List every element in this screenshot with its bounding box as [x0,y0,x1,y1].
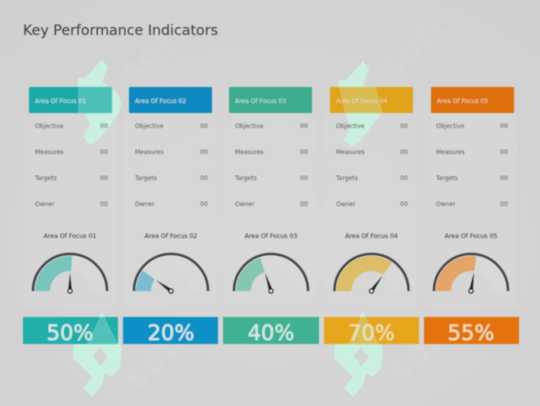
metric rows 05: Objective [436,123,465,130]
watermark: faint wordmarks: soft [371,5,457,89]
metric rows 03: Objective [235,123,264,130]
metric rows 01: 00 [100,175,108,182]
metric rows 03: Owner [235,201,255,208]
header 04 [330,87,413,113]
gauge 04 [334,254,408,293]
metric rows 02: Objective [135,123,164,130]
watermark overlay on coloured bars [78,87,383,344]
metric rows 02: 00 [200,175,208,182]
metric rows 01 [34,123,108,208]
metric rows 04: Targets [335,175,358,182]
metric rows 03: Targets [234,175,257,182]
metric rows 05: 00 [500,201,508,208]
metric rows 03: 00 [300,149,308,156]
metric rows 05: 00 [500,149,508,156]
metric rows 05: Targets [435,175,458,182]
metric rows 03: Measures [235,149,264,156]
metric rows 04: 00 [400,123,408,130]
gauge name 03: Area Of Focus 03 [245,233,297,240]
metric rows 05: Measures [436,149,465,156]
watermark: faint wordmarks: soft [111,9,197,93]
metric rows 05: 00 [500,175,508,182]
value bar 03 [223,317,319,345]
header 02: Area Of Focus 02 [135,98,186,105]
header 03 [229,87,312,113]
gauge name 01: Area Of Focus 01 [44,233,96,240]
value bar 03: 40% [248,321,294,345]
metric rows 01: 00 [100,149,108,156]
gauge 05 [434,254,508,293]
metric rows 03: 00 [300,201,308,208]
watermark: faint wordmarks: soft [114,315,200,399]
header 01 [29,87,112,113]
panel: area of focus 04 [324,87,419,345]
watermark logos [73,59,383,397]
metric rows 04: 00 [400,149,408,156]
metric rows 02: 00 [200,123,208,130]
metric rows 02: Measures [135,149,164,156]
metric rows 04 [335,123,408,208]
value bar 02 [123,317,218,345]
metric rows 03 [234,123,308,208]
metric rows 02 [134,123,208,208]
panel: area of focus 03 [223,87,319,345]
panel backgrounds [24,113,517,308]
value bar 01 [23,317,118,345]
metric rows 01: 00 [100,201,108,208]
metric rows 01: Objective [35,123,64,130]
gauge 02 [134,254,208,293]
metric rows 02: 00 [200,149,208,156]
metric rows 04: Objective [336,123,365,130]
title: Key Performance Indicators [23,23,218,39]
value bar 05 [424,317,519,345]
metric rows 05: Owner [436,201,456,208]
metric rows 04: Owner [336,201,356,208]
header 03: Area Of Focus 03 [235,98,286,105]
metric rows 04: 00 [400,201,408,208]
metric rows 02: 00 [200,201,208,208]
metric rows 04: Measures [336,149,365,156]
metric rows 01: Owner [35,201,55,208]
metric rows 01: Targets [34,175,57,182]
metric rows 01: Measures [35,149,64,156]
metric rows 05: 00 [500,123,508,130]
value bar 01: 50% [47,321,93,345]
panel: area of focus 05 [424,87,519,345]
value bar 04 [324,317,419,345]
header 05 [431,87,514,113]
gauge name 05: Area Of Focus 05 [445,233,497,240]
metric rows 04: 00 [400,175,408,182]
metric rows 03: 00 [300,123,308,130]
gauge name 04: Area Of Focus 04 [345,233,398,240]
panel: area of focus 01 [23,87,118,345]
watermark: faint wordmarks [111,5,465,399]
metric rows 05 [435,123,508,208]
value bar 04: 70% [348,321,395,345]
header 02 [129,87,212,113]
gauge name 02: Area Of Focus 02 [145,233,197,240]
header 01: Area Of Focus 01 [35,98,86,105]
value bar 02: 20% [148,321,194,345]
metric rows 01: 00 [100,123,108,130]
value bar 05: 55% [448,321,494,345]
gauge 01 [33,254,107,293]
gauge 03 [234,254,308,293]
header 05: Area Of Focus 05 [437,98,488,105]
watermark: faint wordmarks: soft [379,308,465,392]
header 04: Area Of Focus 04 [336,98,387,105]
panel: area of focus 02 [123,87,218,345]
metric rows 03: 00 [300,175,308,182]
metric rows 02: Owner [135,201,155,208]
metric rows 02: Targets [134,175,157,182]
